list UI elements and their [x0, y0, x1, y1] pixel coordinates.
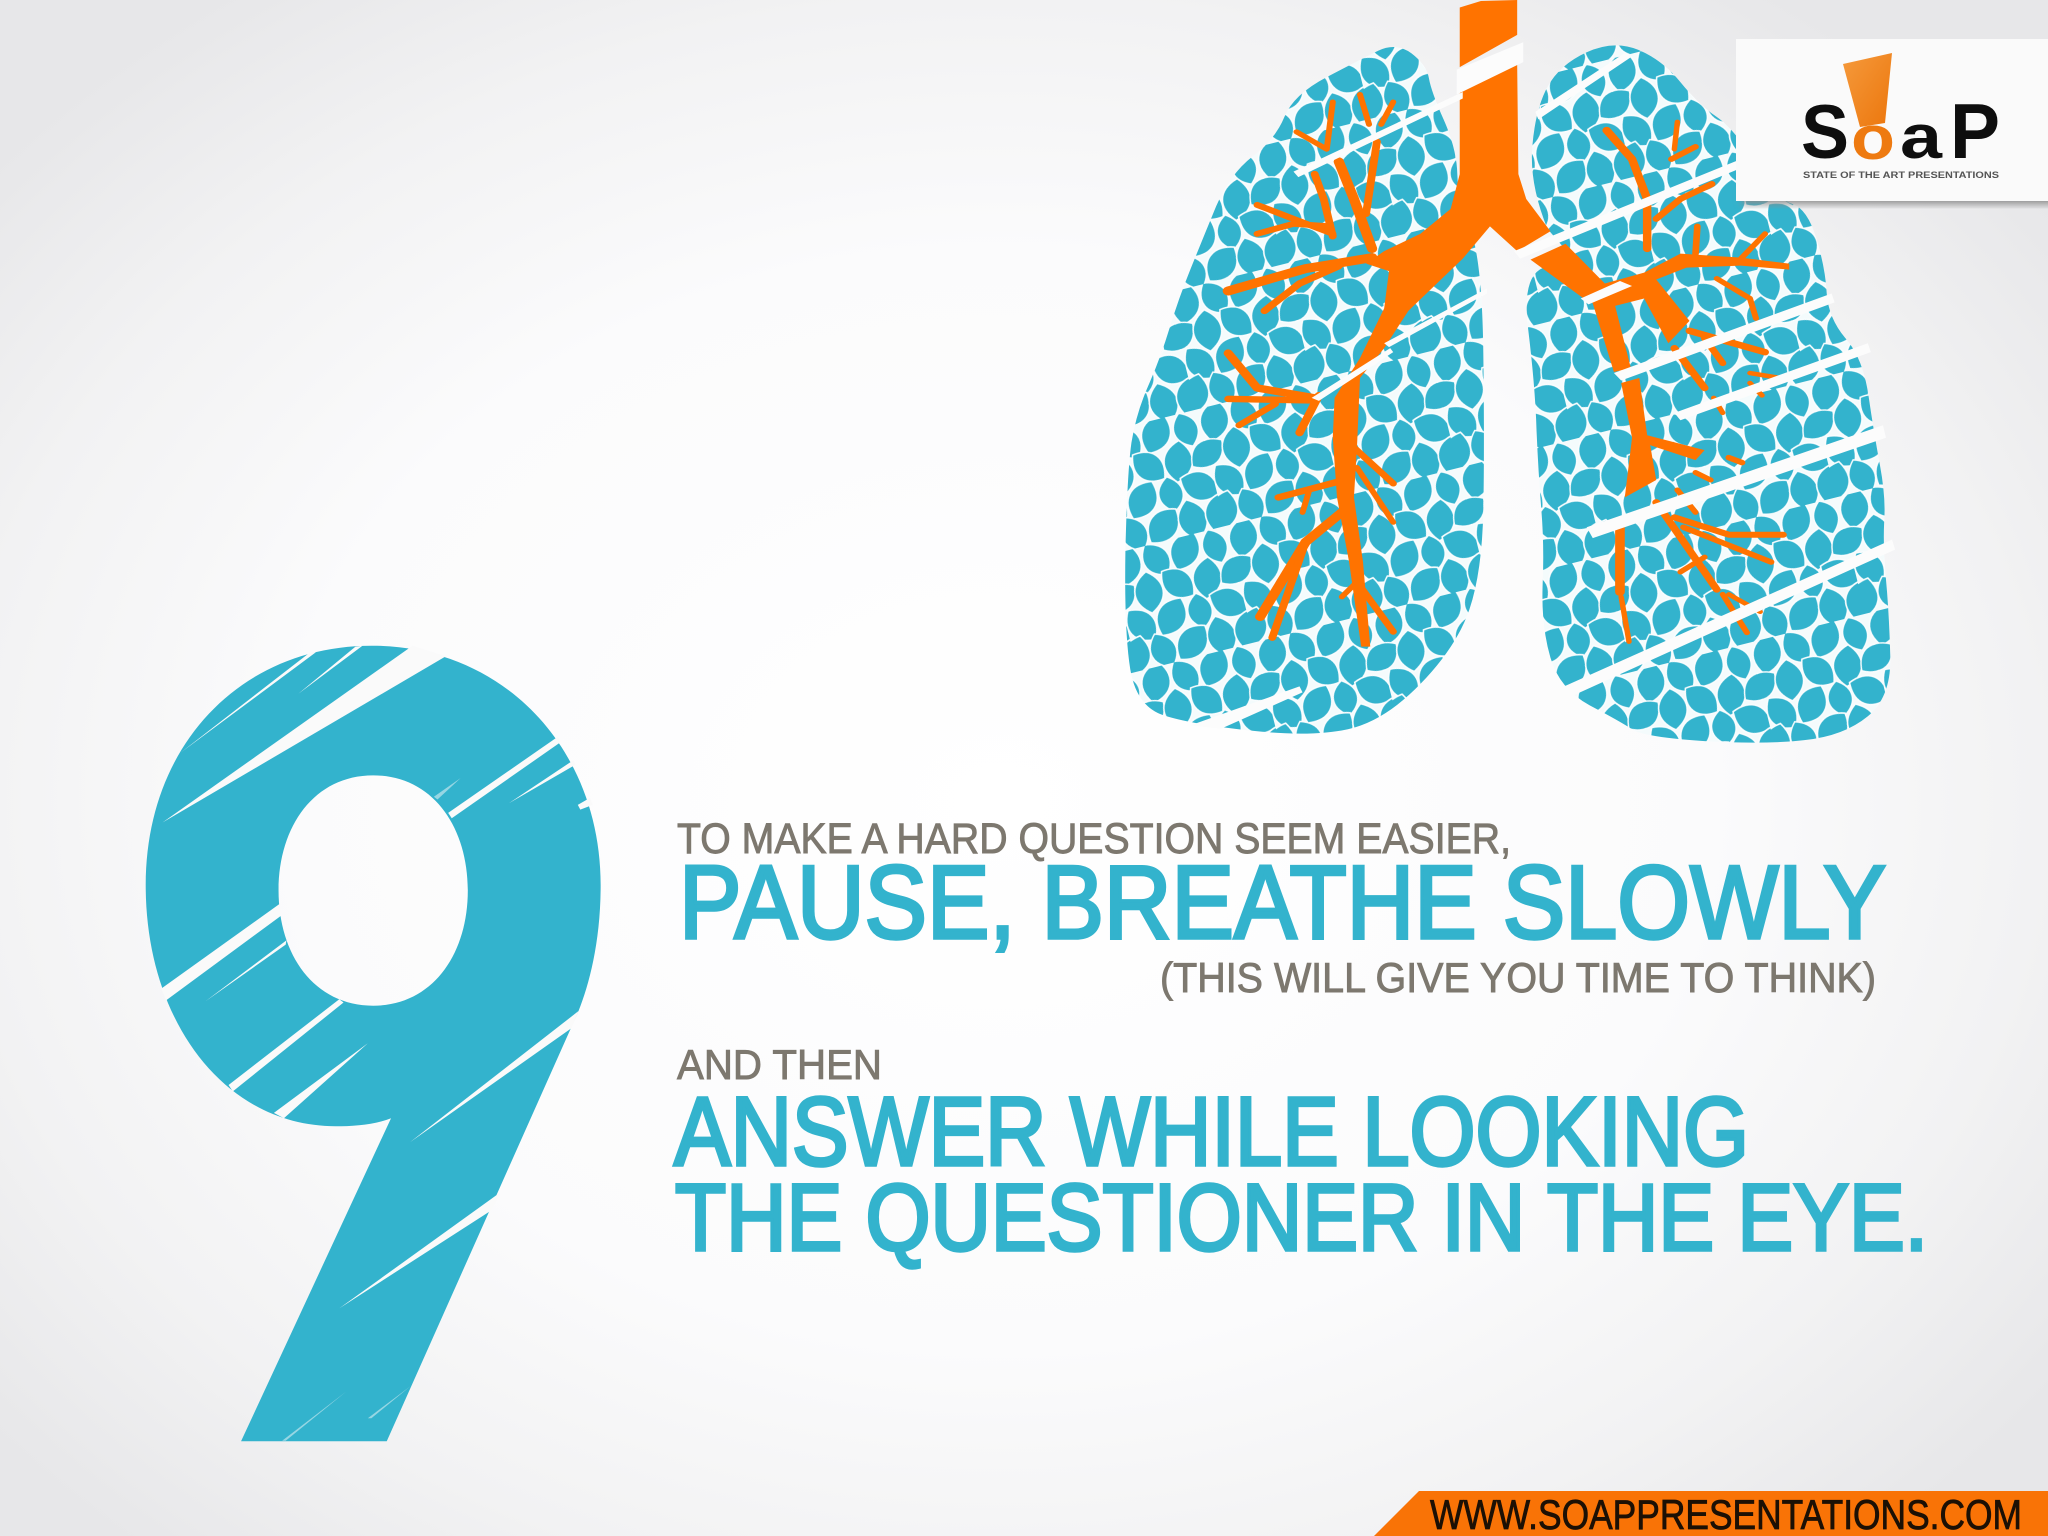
trachea and main bronchi — [1333, 0, 1550, 647]
wordmark: P — [1950, 87, 2000, 175]
scratches on the 9 — [161, 646, 593, 1441]
wordmark: a — [1900, 103, 1943, 172]
headline: answer line 1: ANSWER WHILE LOOKING — [674, 1077, 1749, 1186]
banner shape — [1374, 1491, 2048, 1536]
connector: AND THEN — [677, 1041, 882, 1088]
wordmark — [1801, 87, 2000, 175]
tagline: STATE OF THE ART PRESENTATIONS — [1803, 170, 1999, 181]
diagonal cuts across the lungs — [1191, 42, 1895, 729]
logo panel — [1736, 39, 2048, 204]
lung tissue: leaf pattern — [1125, 45, 1890, 743]
panel card — [1736, 39, 2048, 201]
panel shadow — [1742, 190, 2048, 204]
aside: (THIS WILL GIVE YOU TIME TO THINK) — [1160, 954, 1876, 1001]
text block — [674, 815, 1928, 1271]
headline: pause, breathe slowly: PAUSE, BREATHE SLOWLY — [679, 845, 1886, 961]
illustration: lungs — [1125, 0, 1890, 743]
icon: exclamation mark — [1843, 53, 1892, 127]
bronchial tree — [1228, 0, 1789, 647]
footer banner — [1374, 1491, 2048, 1536]
big number 9 — [146, 646, 601, 1441]
lead-in line: TO MAKE A HARD QUESTION SEEM EASIER, — [677, 815, 1511, 863]
wordmark: S — [1801, 90, 1849, 175]
wordmark: o — [1851, 104, 1895, 173]
